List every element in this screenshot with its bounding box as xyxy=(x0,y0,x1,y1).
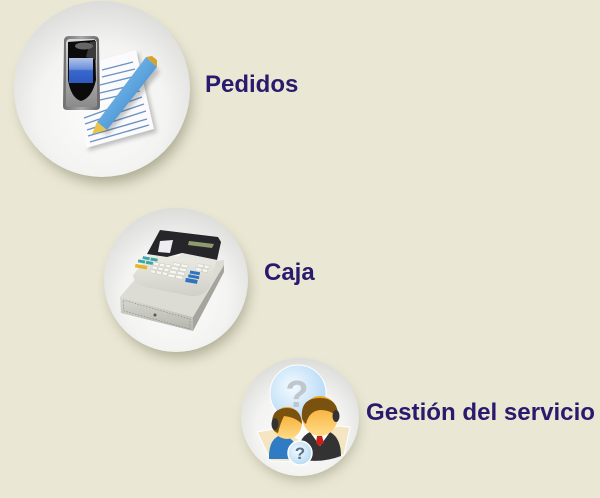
disc: Caja xyxy=(104,208,248,357)
icon: support agents: ? xyxy=(295,444,305,463)
disc: Gestión del servicio xyxy=(241,358,359,479)
panel: Caja xyxy=(104,208,315,357)
panel: Pedidos xyxy=(14,1,298,183)
icon: paper and pen with phone xyxy=(63,36,160,151)
heading: Caja: Caja xyxy=(264,259,315,286)
panel: Gestión del servicio xyxy=(241,358,595,479)
heading: Pedidos: Pedidos xyxy=(205,71,298,98)
icon: support agents xyxy=(257,365,350,465)
icon: cash register xyxy=(120,230,224,331)
disc: Pedidos xyxy=(14,1,191,183)
heading: Gestión del servicio: Gestión del servicio xyxy=(366,399,595,426)
icon: support agents: ? xyxy=(285,374,309,416)
